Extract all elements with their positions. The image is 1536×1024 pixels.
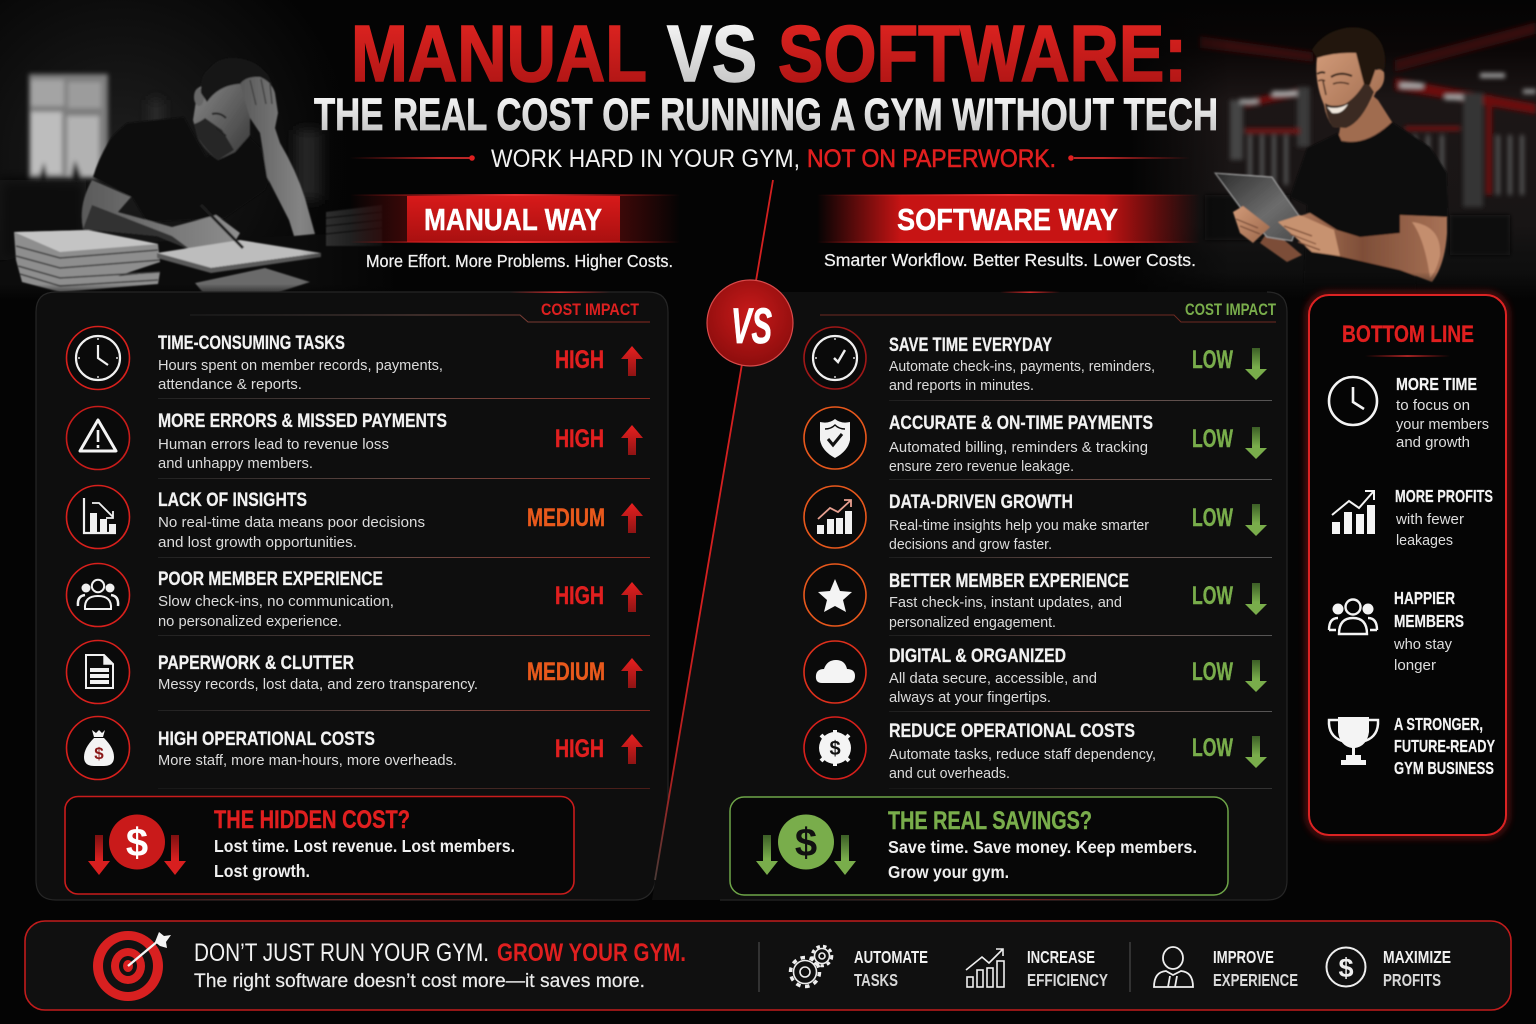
row description: Automate check-ins, payments, reminders,	[889, 359, 1155, 375]
icon: growing dollar: $	[795, 821, 817, 865]
photo: happy gym owner with tablet	[1130, 0, 1536, 300]
man: face	[193, 78, 250, 160]
man: ear	[194, 88, 204, 106]
icon: clock	[66, 326, 130, 390]
row description: Slow check-ins, no communication,	[158, 594, 394, 610]
tagline red part: NOT ON PAPERWORK.	[807, 145, 1056, 173]
cost level: LOW	[1192, 425, 1233, 453]
man: hand under tablet	[1233, 206, 1270, 243]
man: eyes and brows	[1317, 72, 1352, 77]
row: more errors	[66, 406, 643, 472]
arrow down	[1245, 736, 1267, 768]
row description line 2: and reports in minutes.	[889, 378, 1034, 394]
banner label: MANUAL WAY	[424, 202, 602, 237]
banner: manual way	[350, 194, 680, 243]
cost level: HIGH	[555, 425, 604, 453]
benefit label: IMPROVE	[1213, 947, 1274, 967]
footer banner	[25, 921, 1511, 1010]
item: more time	[1329, 374, 1489, 451]
title	[351, 9, 1187, 98]
arrow up	[621, 658, 643, 688]
column heading: cost impact: COST IMPACT	[541, 301, 639, 319]
paper stack	[14, 230, 160, 292]
icon: target with arrow	[93, 931, 171, 1001]
footer subline: The right software doesn’t cost more—it saves more.	[194, 971, 645, 992]
cost level: LOW	[1192, 582, 1233, 610]
banner: software way	[817, 194, 1200, 243]
photo: stressed gym owner at desk with paperwork	[0, 0, 410, 300]
item title: MORE PROFITS	[1395, 486, 1493, 506]
icon: dollar circle: $	[1338, 953, 1354, 983]
icon: trophy	[1329, 717, 1378, 765]
panel: bottom line	[1309, 295, 1506, 835]
arrow up	[621, 734, 643, 764]
arrow up	[621, 346, 643, 376]
item text: who stay	[1393, 637, 1453, 653]
row: better member experience	[804, 564, 1267, 631]
item text line 2: your members	[1396, 417, 1489, 433]
VS label: VS	[731, 298, 772, 354]
software way subtitle: Smarter Workflow. Better Results. Lower Costs.	[824, 250, 1196, 270]
icon: document	[66, 640, 130, 704]
row title: DIGITAL & ORGANIZED	[889, 645, 1066, 667]
man: beard	[194, 118, 234, 160]
benefit label line 2: EXPERIENCE	[1213, 970, 1298, 990]
tablet	[1215, 173, 1300, 241]
title: SOFTWARE: SOFTWARE:	[778, 9, 1187, 98]
column heading: cost impact: COST IMPACT	[1185, 301, 1276, 319]
row description: Automate tasks, reduce staff dependency,	[889, 747, 1156, 763]
icon: declining chart	[66, 486, 130, 548]
man: eyelids	[1318, 80, 1349, 95]
benefit label: AUTOMATE	[854, 947, 928, 967]
benefit label: MAXIMIZE	[1383, 947, 1451, 967]
icon: dollar badge: $	[829, 738, 841, 760]
row title: HIGH OPERATIONAL COSTS	[158, 728, 375, 750]
photo fade	[300, 0, 400, 300]
row: reduce operational costs	[804, 717, 1267, 782]
row description line 2: attendance & reports.	[158, 377, 302, 393]
photo fade	[1130, 0, 1230, 300]
man: back forearm	[1260, 228, 1302, 262]
cost level: MEDIUM	[527, 658, 605, 686]
cost level: LOW	[1192, 734, 1233, 762]
arrow up	[621, 582, 643, 612]
row description line 2: decisions and grow faster.	[889, 537, 1052, 553]
item: stronger business	[1329, 714, 1495, 778]
benefit: improve experience	[1154, 947, 1298, 990]
callout: real savings	[730, 797, 1228, 895]
row description: Human errors lead to revenue loss	[158, 437, 389, 453]
item title line 2: FUTURE-READY	[1394, 736, 1495, 756]
arrow down	[1245, 660, 1267, 692]
benefit: maximize profits	[1326, 947, 1451, 990]
subtitle: THE REAL COST OF RUNNING A GYM WITHOUT TECH	[314, 89, 1218, 140]
icon: clock	[1329, 377, 1377, 425]
arrow down	[1245, 504, 1267, 536]
row title: SAVE TIME EVERYDAY	[889, 334, 1052, 356]
man: raised arm and hand	[240, 77, 315, 236]
man: hair	[1312, 27, 1385, 85]
callout text: Lost time. Lost revenue. Lost members.	[214, 836, 515, 856]
panel: software way	[652, 292, 1287, 900]
benefit: automate tasks	[790, 946, 928, 990]
icon: cloud	[804, 641, 866, 703]
row title: LACK OF INSIGHTS	[158, 489, 307, 511]
item text: to focus on	[1396, 398, 1470, 414]
title: VS: VS	[667, 9, 757, 98]
row: poor member experience	[66, 564, 643, 630]
row title: PAPERWORK & CLUTTER	[158, 652, 354, 674]
row description: Hours spent on member records, payments,	[158, 358, 443, 374]
man: shirt	[1290, 122, 1448, 300]
arrow down	[1245, 348, 1267, 380]
icon: falling dollar	[88, 814, 186, 875]
divider: diagonal red line	[655, 180, 773, 880]
item title line 3: GYM BUSINESS	[1394, 758, 1494, 778]
row: save time everyday	[804, 327, 1267, 394]
row description: Fast check-ins, instant updates, and	[889, 595, 1122, 611]
banner label: SOFTWARE WAY	[897, 202, 1118, 237]
manual way subtitle: More Effort. More Problems. Higher Costs.	[366, 251, 673, 271]
heading: bottom line: BOTTOM LINE	[1342, 321, 1474, 348]
footer headline red: GROW YOUR GYM.	[497, 939, 686, 967]
icon: people	[66, 564, 130, 626]
cost level: LOW	[1192, 504, 1233, 532]
cost level: HIGH	[555, 346, 604, 374]
row title: DATA-DRIVEN GROWTH	[889, 491, 1073, 513]
cost level: HIGH	[555, 582, 604, 610]
arrow up	[621, 503, 643, 533]
item title line 2: MEMBERS	[1394, 611, 1464, 631]
item: more profits	[1332, 486, 1493, 549]
item title: A STRONGER,	[1394, 714, 1483, 734]
item text line 2: leakages	[1396, 533, 1453, 549]
tagline	[350, 145, 1190, 173]
man: hair	[201, 58, 272, 102]
row description: More staff, more man-hours, more overheads.	[158, 753, 457, 769]
row description: All data secure, accessible, and	[889, 671, 1097, 687]
item text line 3: and growth	[1396, 435, 1470, 451]
VS badge	[707, 280, 793, 366]
man: near arm	[82, 180, 240, 250]
benefit label: INCREASE	[1027, 947, 1095, 967]
row title: TIME-CONSUMING TASKS	[158, 332, 345, 354]
row title: MORE ERRORS & MISSED PAYMENTS	[158, 410, 447, 432]
icon: dollar badge	[804, 717, 866, 779]
panel: manual way	[36, 292, 668, 900]
row: time-consuming tasks	[66, 326, 643, 393]
row description line 2: and cut overheads.	[889, 766, 1010, 782]
desk	[0, 234, 400, 300]
row: lack of insights	[66, 486, 643, 551]
row description line 2: and lost growth opportunities.	[158, 535, 357, 551]
icon: people	[1329, 600, 1377, 634]
benefit label line 2: PROFITS	[1383, 970, 1441, 990]
row title: REDUCE OPERATIONAL COSTS	[889, 720, 1135, 742]
row description line 2: always at your fingertips.	[889, 690, 1051, 706]
icon: warning	[66, 406, 130, 470]
icon: growth chart	[1332, 491, 1375, 534]
cost level: MEDIUM	[527, 504, 605, 532]
icon: growing dollar	[756, 814, 856, 875]
man: front hand	[1278, 215, 1340, 256]
item: happier members	[1329, 588, 1464, 674]
callout: hidden cost	[65, 796, 574, 894]
icon: chart	[966, 949, 1004, 987]
row: accurate payments	[804, 407, 1267, 475]
right paper stack	[326, 205, 382, 246]
icon: growth chart	[804, 486, 866, 548]
row: paperwork and clutter	[66, 640, 643, 704]
row description line 2: personalized engagement.	[889, 615, 1056, 631]
item title: MORE TIME	[1396, 374, 1477, 394]
row description line 2: no personalized experience.	[158, 614, 342, 630]
benefit label line 2: TASKS	[854, 970, 898, 990]
footer headline: DON’T JUST RUN YOUR GYM.	[194, 939, 489, 967]
callout text: Save time. Save money. Keep members.	[888, 837, 1197, 857]
icon: clock with check	[804, 327, 866, 389]
row description: Messy records, lost data, and zero transparency.	[158, 677, 478, 693]
arrow up	[621, 425, 643, 455]
item text: with fewer	[1395, 512, 1464, 528]
row description: Automated billing, reminders & tracking	[889, 440, 1148, 456]
callout heading: THE HIDDEN COST?	[214, 806, 410, 834]
row: data-driven growth	[804, 486, 1267, 553]
row title: BETTER MEMBER EXPERIENCE	[889, 570, 1129, 592]
row title: POOR MEMBER EXPERIENCE	[158, 568, 383, 590]
icon: person	[1154, 947, 1193, 987]
icon: star	[804, 564, 866, 626]
benefit label line 2: EFFICIENCY	[1027, 970, 1108, 990]
benefit: increase efficiency	[966, 947, 1108, 990]
row description: No real-time data means poor decisions	[158, 515, 425, 531]
title: MANUAL: MANUAL	[351, 9, 647, 98]
item title: HAPPIER	[1394, 588, 1455, 608]
man: face	[1316, 51, 1384, 128]
icon: shield check	[804, 407, 866, 469]
man: arm	[1278, 213, 1447, 282]
row description line 2: and unhappy members.	[158, 456, 313, 472]
callout heading: THE REAL SAVINGS?	[888, 807, 1092, 835]
tagline white part: WORK HARD IN YOUR GYM,	[491, 145, 800, 173]
row title: ACCURATE & ON-TIME PAYMENTS	[889, 412, 1153, 434]
arrow down	[1245, 583, 1267, 615]
man: shirt	[93, 117, 270, 222]
man: neck	[1338, 95, 1392, 142]
cost level: LOW	[1192, 658, 1233, 686]
open notebook	[157, 240, 321, 268]
arrow down	[1245, 427, 1267, 459]
icon: money bag: $	[94, 744, 104, 763]
pen	[201, 205, 243, 248]
icon: gears	[790, 946, 832, 986]
callout text line 2: Grow your gym.	[888, 862, 1009, 882]
cost level: HIGH	[555, 735, 604, 763]
man: beard	[1325, 80, 1374, 128]
man: smile	[1327, 104, 1348, 113]
callout text line 2: Lost growth.	[214, 861, 310, 881]
icon: money bag	[66, 716, 130, 780]
row description line 2: ensure zero revenue leakage.	[889, 459, 1074, 475]
row description: Real-time insights help you make smarter	[889, 518, 1149, 534]
row: high operational costs	[66, 716, 643, 780]
icon: falling dollar: $	[126, 821, 148, 865]
item text line 2: longer	[1394, 658, 1436, 674]
cost level: LOW	[1192, 346, 1233, 374]
row: digital and organized	[804, 641, 1267, 706]
